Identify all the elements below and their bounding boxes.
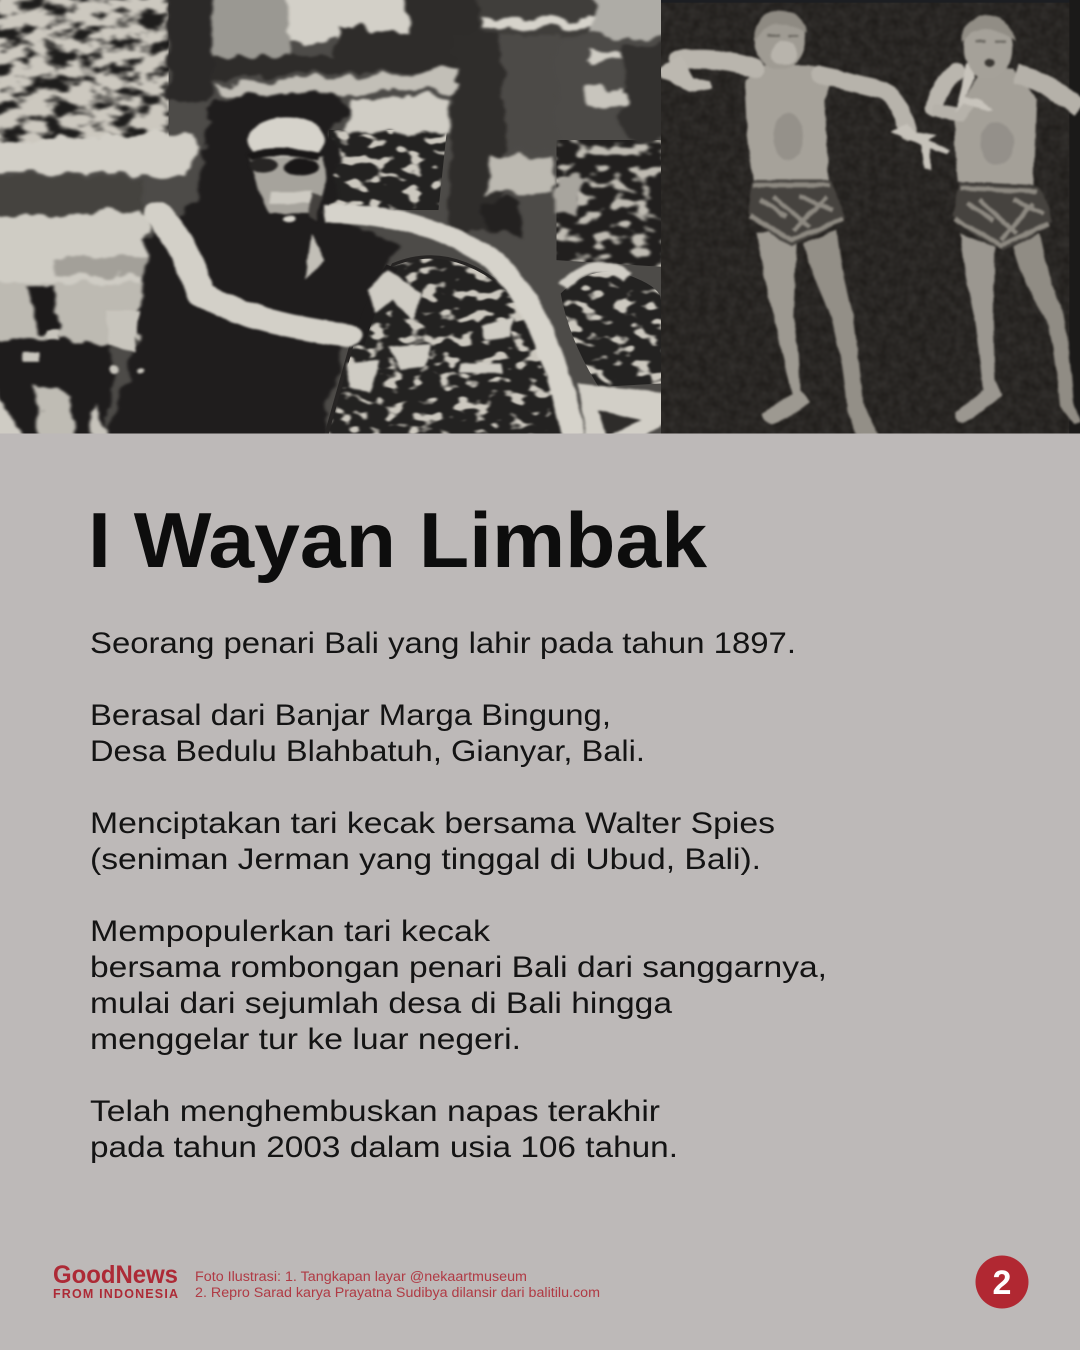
head [248,117,325,163]
text block: death: pada tahun 2003 dalam usia 106 tahun. [90,1131,678,1164]
text block: origin [90,699,645,768]
text block: origin: Desa Bedulu Blahbatuh, Gianyar, Bali. [90,735,645,768]
text block: death: Telah menghembuskan napas terakhir [90,1095,660,1128]
text block: popularising kecak [90,915,827,1056]
photo credits: 2. Repro Sarad karya Prayatna Sudibya dilansir dari balitilu.com [195,1285,600,1300]
photo credits [195,1269,600,1300]
right wheel [560,272,661,386]
logo: GoodNews from Indonesia: GoodNews [53,1261,178,1289]
left hand flecks [23,310,144,374]
text block: kecak creation: (seniman Jerman yang tinggal di Ubud, Bali). [90,843,761,876]
text block: origin: Berasal dari Banjar Marga Bingung, [90,699,611,732]
right dancer [955,233,1003,423]
page number badge: 2 [993,1264,1011,1302]
text block: popularising kecak: Mempopulerkan tari kecak [90,915,491,948]
photo 2: two elderly dancers posing [661,0,1080,434]
arm right / shield rim [325,213,573,437]
logo: GoodNews from Indonesia [53,1261,178,1301]
photo 1: dancer in black and white with round shield [0,0,661,434]
photo credits: Foto Ilustrasi: 1. Tangkapan layar @nekaartmuseum [195,1269,527,1284]
right shorts [952,183,1052,249]
logo: GoodNews from Indonesia: FROM INDONESIA [53,1287,178,1301]
shield flecks [346,270,514,393]
arm left of figure [158,213,348,335]
text block: popularising kecak: mulai dari sejumlah desa di Bali hingga [90,987,672,1020]
text block: popularising kecak: menggelar tur ke luar negeri. [90,1023,521,1056]
shield interior [325,255,569,434]
text block: death [90,1095,678,1164]
left shorts [747,180,845,246]
text block: kecak creation [90,807,775,876]
left bands [0,132,204,173]
page number badge [976,1256,1028,1308]
title: I Wayan Limbak [88,496,708,584]
text block: kecak creation: Menciptakan tari kecak bersama Walter Spies [90,807,775,840]
text block: popularising kecak: bersama rombongan penari Bali dari sanggarnya, [90,951,827,984]
text block: birth: Seorang penari Bali yang lahir pada tahun 1897. [90,627,796,660]
left dancer [757,230,810,424]
mottled textures [0,0,173,150]
figure [105,93,400,447]
